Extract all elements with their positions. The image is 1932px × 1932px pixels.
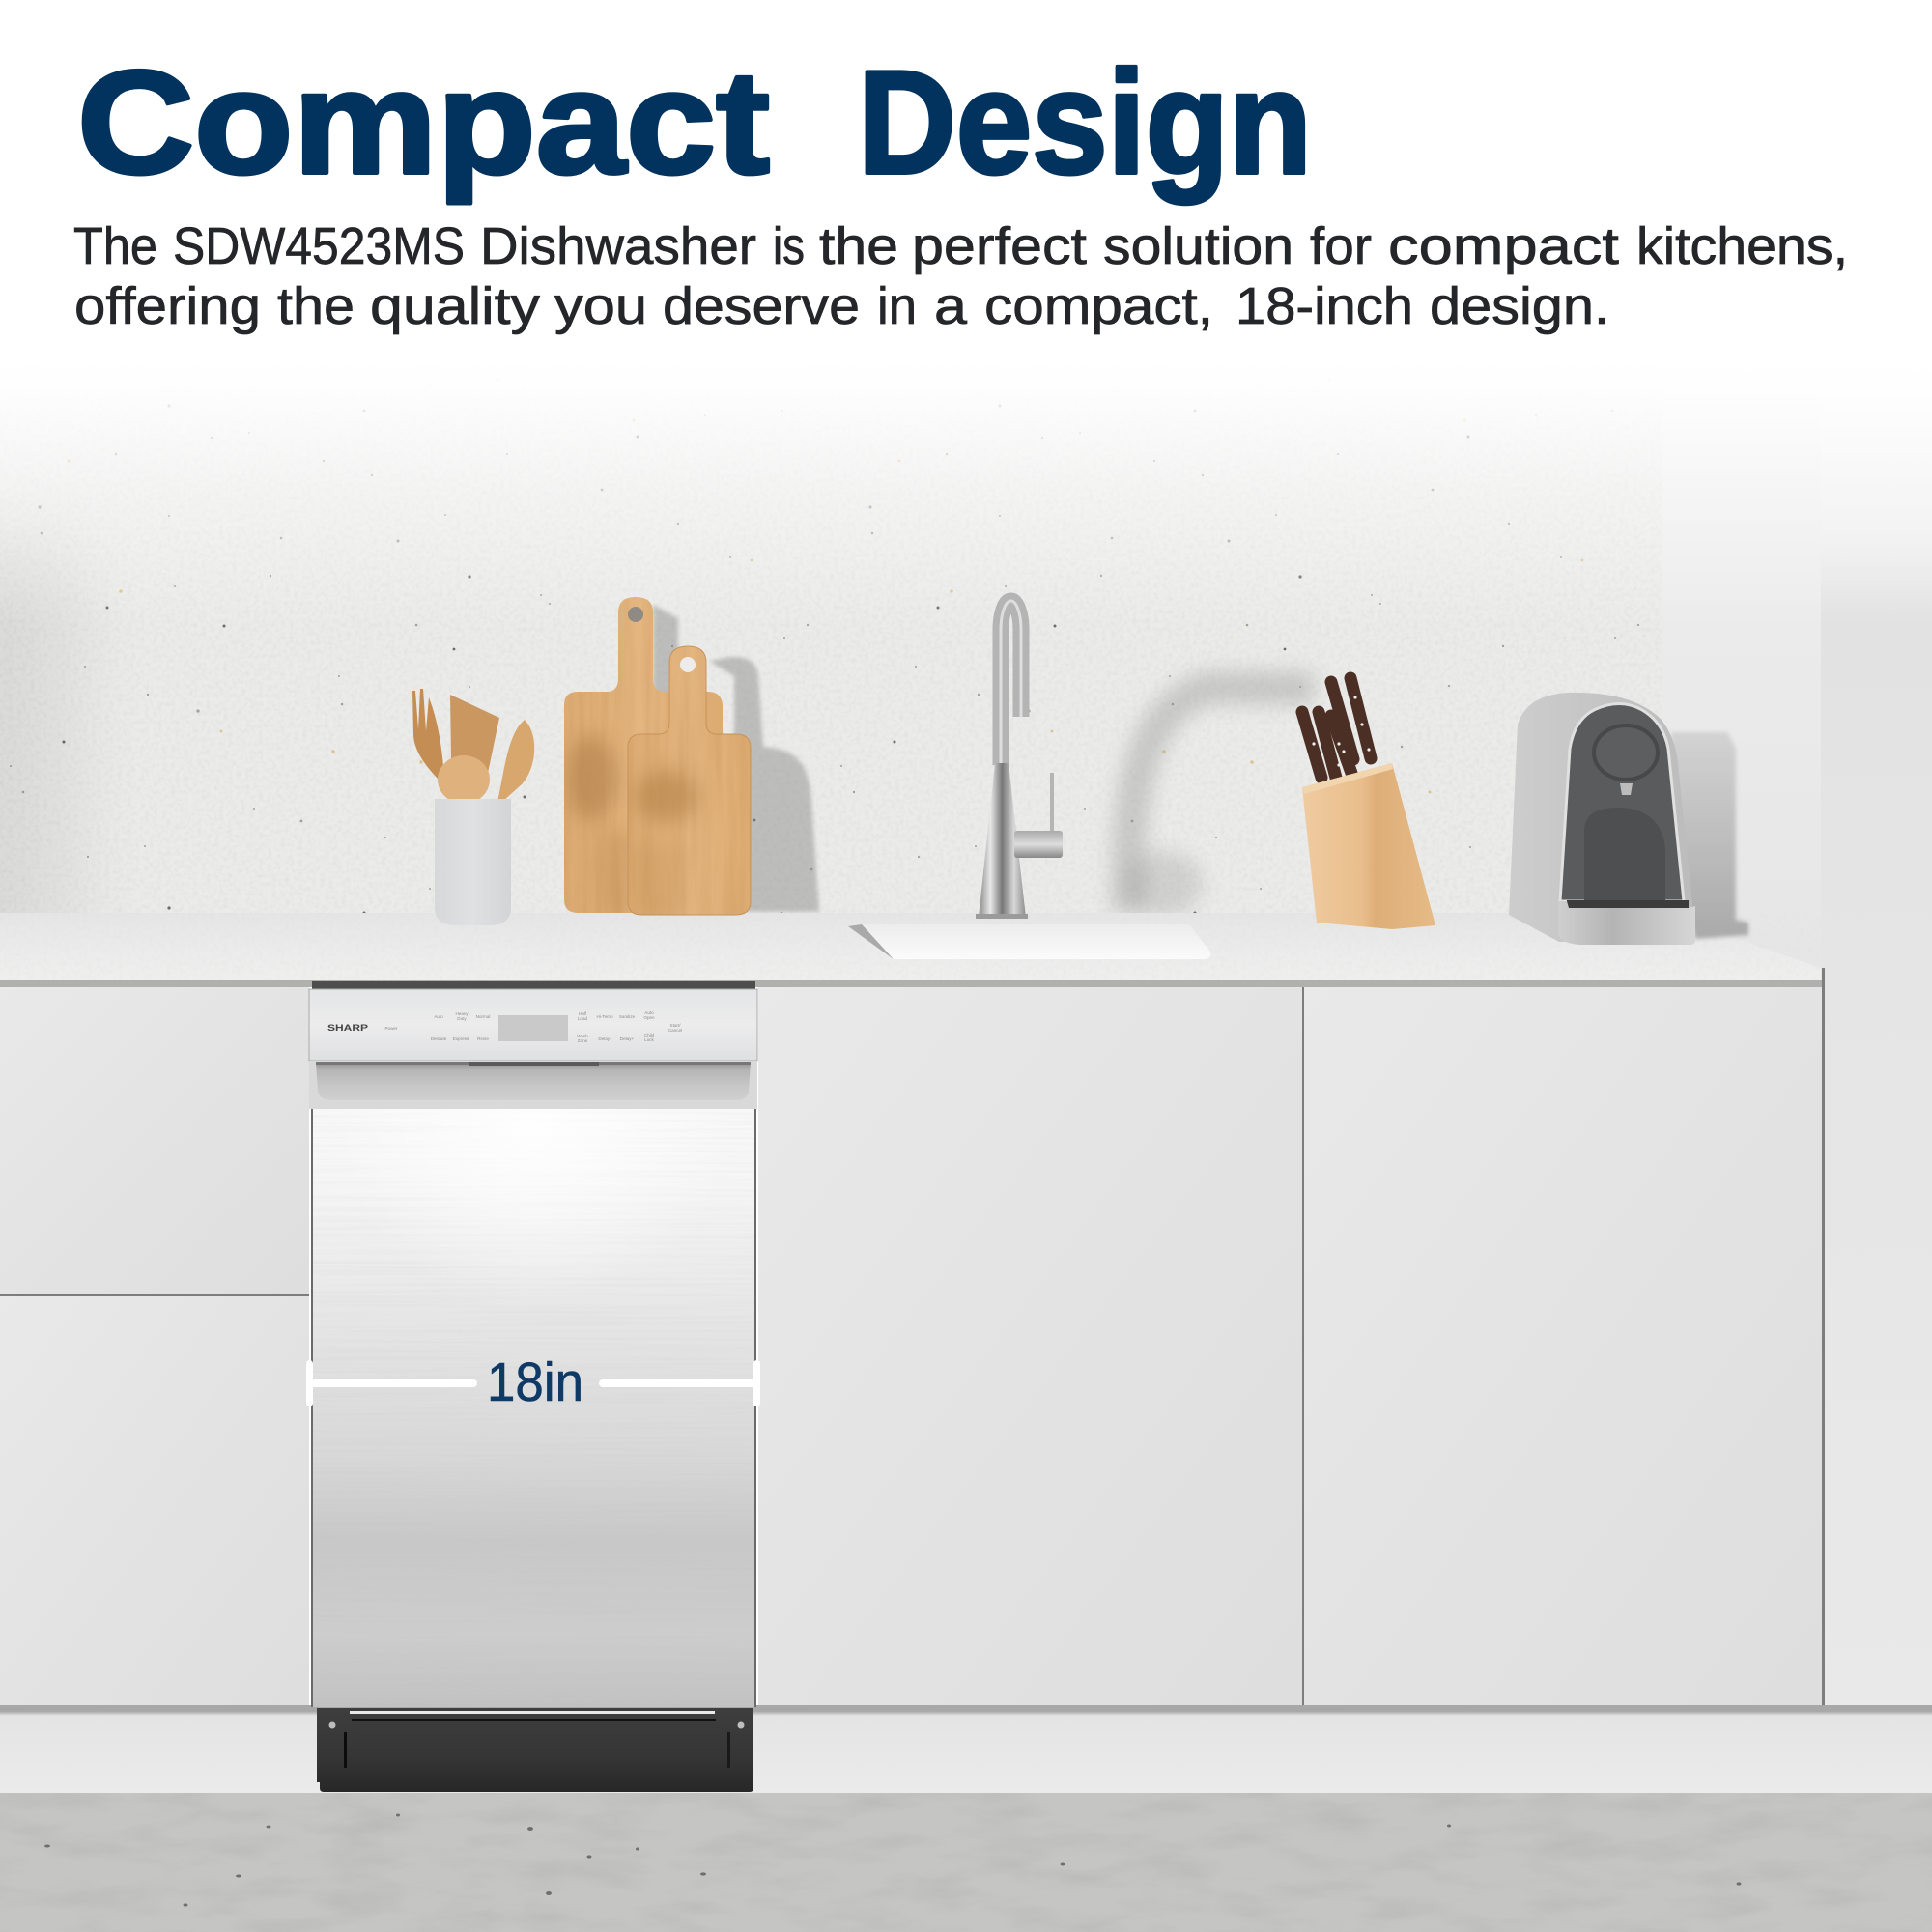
description text: 18-inch (1236, 277, 1413, 335)
control panel (309, 989, 757, 1061)
door handle recess (309, 1061, 757, 1109)
inner recess (1584, 808, 1665, 901)
button labels: Auto (434, 1014, 443, 1019)
title: Design (858, 41, 1312, 205)
metal tray (1558, 901, 1695, 945)
icon: round spoon head (438, 755, 490, 804)
button labels: Rinse (477, 1037, 489, 1041)
description text: the (277, 277, 355, 335)
dark front panel (1560, 703, 1684, 901)
small cutting board (628, 646, 751, 918)
silver housing (1509, 693, 1692, 942)
toe kick (0, 1705, 1932, 1793)
description text: is (773, 217, 805, 275)
left upper cabinet door (0, 987, 309, 1294)
knife block (1302, 678, 1435, 929)
button labels: Sanitize (619, 1014, 636, 1019)
nozzle (1620, 783, 1633, 795)
countertop (0, 913, 1824, 987)
centre cabinet door (758, 987, 1302, 1705)
description text: compact, (984, 277, 1213, 335)
description text: solution (1103, 217, 1293, 275)
left dimension line (306, 1360, 477, 1406)
sink (848, 924, 1210, 959)
top dark strip (312, 981, 755, 989)
button labels: Lock (644, 1037, 655, 1042)
description text: SDW4523MS (173, 217, 465, 275)
button labels: Zone (578, 1038, 588, 1043)
left lower cabinet door (0, 1296, 309, 1705)
description text: Dishwasher (480, 217, 756, 275)
description text: the (819, 217, 898, 275)
button labels: Normal (476, 1014, 490, 1019)
description text (73, 217, 1848, 335)
button labels: Start/ (670, 1023, 681, 1028)
icon: wooden spoon (497, 720, 534, 802)
description text: perfect (912, 217, 1087, 275)
icon: wooden spatula (450, 695, 499, 773)
title (77, 41, 1312, 205)
utensil cup (412, 689, 534, 925)
cup body (435, 799, 511, 925)
description text: quality (370, 277, 540, 335)
button labels: Duty (457, 1016, 467, 1021)
dimension label: 18in (487, 1351, 583, 1413)
width dimension marker (306, 1351, 760, 1413)
description text: design. (1430, 277, 1609, 335)
button labels: Delay+ (620, 1037, 635, 1041)
button labels: Open (643, 1015, 655, 1020)
concrete floor (0, 1793, 1932, 1932)
right end panel (1821, 357, 1932, 1706)
faucet (976, 601, 1063, 919)
icon: wooden fork (412, 689, 443, 779)
description text: deserve (663, 277, 860, 335)
description text: compact (1388, 217, 1619, 275)
coffee machine (1509, 693, 1695, 945)
black kick plate (317, 1708, 753, 1792)
button labels (384, 1010, 682, 1043)
board and faucet shadows (653, 605, 1314, 917)
backsplash wall (0, 404, 1662, 913)
white top fade (0, 357, 1932, 628)
button labels: Load (578, 1016, 588, 1021)
button labels: Heavy (455, 1011, 469, 1016)
button labels: Cancel (668, 1028, 682, 1033)
description text: a (934, 277, 968, 335)
button labels: Wash (577, 1034, 588, 1038)
description text: offering (74, 277, 261, 335)
right cabinet door (1304, 987, 1822, 1705)
button labels: Auto (644, 1010, 654, 1015)
button labels: Delicate (431, 1037, 447, 1041)
button labels: Hi-Temp (596, 1014, 613, 1019)
description text: The (73, 217, 157, 275)
brand logo: SHARP (327, 1023, 369, 1034)
description text: for (1310, 217, 1372, 275)
description text: in (877, 277, 917, 335)
large cutting board (564, 597, 723, 918)
display window (498, 1015, 568, 1041)
description text: you (554, 277, 647, 335)
button labels: Delay- (598, 1037, 611, 1041)
title: Compact (77, 41, 770, 205)
button labels: Half (579, 1011, 587, 1016)
round dial (1594, 725, 1658, 780)
knife handles (1302, 678, 1371, 779)
block body (1302, 763, 1435, 929)
right side wall (1662, 357, 1821, 976)
stainless door (311, 1109, 756, 1707)
drip grate (1567, 900, 1689, 908)
cutting boards (564, 597, 751, 918)
button labels: Express (453, 1037, 469, 1041)
description text: kitchens, (1636, 217, 1848, 275)
coffee machine shadow (1671, 732, 1748, 939)
cabinet gaps (0, 968, 1825, 1706)
knife rivets (1312, 696, 1371, 767)
dishwasher (309, 981, 757, 1792)
right dimension line (599, 1360, 760, 1406)
button labels: Child (644, 1033, 655, 1037)
button labels: Power (384, 1026, 398, 1031)
